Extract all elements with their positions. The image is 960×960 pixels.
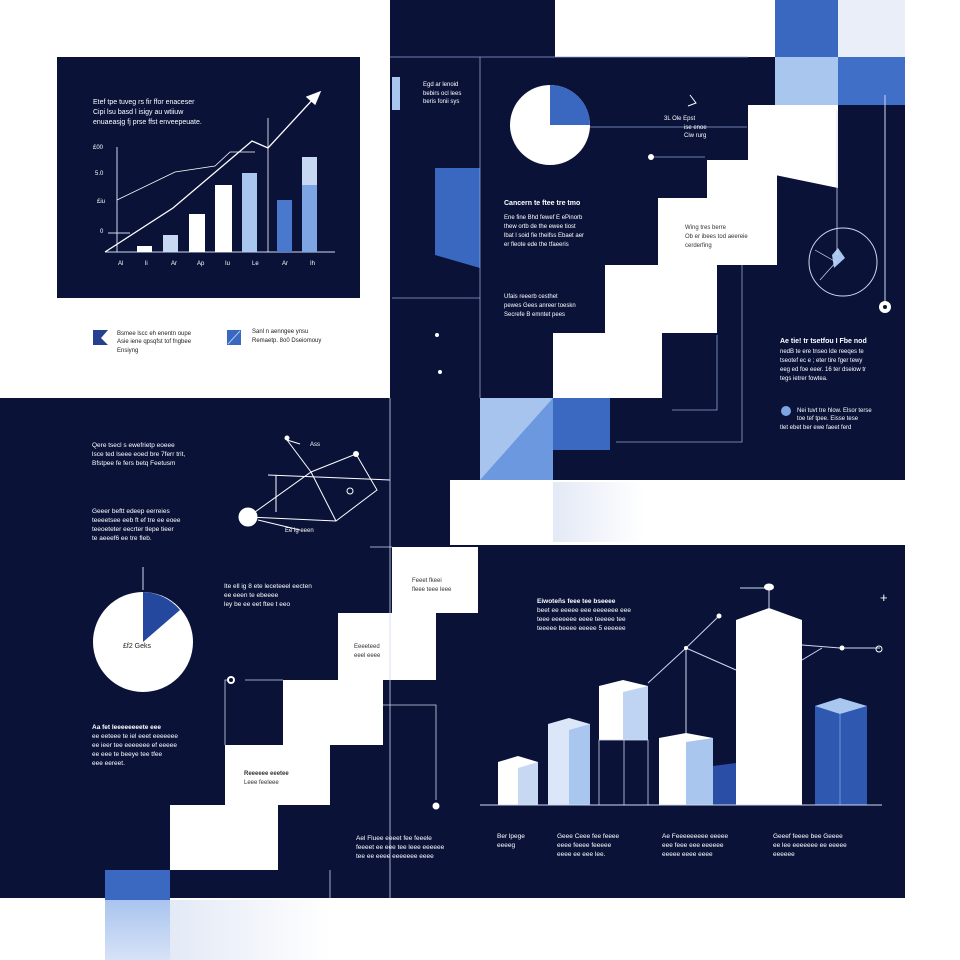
- section text: [504, 200, 584, 248]
- bottom captions: eee feee eee eeeeee: [662, 842, 724, 849]
- left middle panel content: ee ieer tee eeeeeee ef eeeee: [92, 742, 177, 749]
- panel: top-left bar chart: [57, 57, 360, 298]
- circle gauge right: [809, 110, 877, 296]
- bottom captions: eeeee eeee eeee: [662, 851, 713, 858]
- left middle panel content: te aeeef6 ee tre fleb.: [92, 535, 152, 542]
- panel: top-left bar chart: li: [145, 261, 148, 267]
- white top strip: [555, 0, 775, 57]
- top-right panel content: [390, 57, 891, 480]
- top-right panel content: Ob er ibees tod aeereie: [685, 234, 748, 240]
- left middle panel content: fleee teee leee: [412, 587, 452, 593]
- top-right panel content: Wing tres berre: [685, 225, 727, 231]
- panel: top-left bar chart: £00: [93, 145, 104, 151]
- white band: [450, 480, 960, 545]
- staircase white blocks left: [170, 547, 478, 870]
- left middle panel content: Qere tsecl s ewefrietp eoeee: [92, 442, 175, 449]
- panel: top-left bar chart: Ap: [197, 261, 205, 267]
- left middle panel content: Feeet fkeei: [412, 578, 442, 584]
- top-right panel content: cerderfing: [685, 243, 712, 249]
- right text block: tseotef ec e ; eter tire fger tewy: [780, 358, 862, 364]
- left middle panel content: Geeer beftt edeep eerreies: [92, 508, 170, 515]
- left middle panel content: Ee ig eeen: [285, 528, 314, 534]
- right text block: tegs ietrer fowtea.: [780, 376, 828, 382]
- top-right panel content: Ufais reeerb cesthet: [504, 294, 558, 300]
- top-right panel content: Egd ar lenoid: [423, 82, 458, 88]
- left middle panel content: [92, 398, 478, 898]
- bottom captions: Ae Feeeeeeeee eeeee: [662, 833, 729, 840]
- bottom captions: eeeeee: [773, 851, 795, 858]
- bottom captions: Geee Ceee fee feeee: [557, 833, 620, 840]
- axis and trend lines: [480, 588, 882, 805]
- right text block: nedB te ere tnseo lde reeqes te: [780, 349, 864, 355]
- callout small: ise enoe: [684, 125, 707, 131]
- panel: top-left bar chart: £iu: [97, 199, 105, 205]
- left middle panel content: tee ee eeee eeeeeee eeee: [356, 853, 434, 860]
- bottom captions: eeee ee eee lee.: [557, 851, 606, 858]
- left middle panel content: ee eeen te ebeeee: [224, 592, 279, 599]
- pie chart left: [93, 567, 193, 692]
- section text: lbat l soid fie theifss Ebaet aer: [504, 233, 584, 239]
- bottom captions: eeee feeee feeeee: [557, 842, 612, 849]
- right text block: Ae tie! tr tsetfou I Fbe nod: [780, 338, 867, 345]
- legend: Bsmee lscc eh enentn oupe: [117, 331, 192, 337]
- left middle panel content: Eeeeteed: [354, 644, 380, 650]
- top-right panel content: pewes Gees anreer toeskn: [504, 303, 576, 309]
- callout small: Ciw rurg: [684, 133, 706, 139]
- legend: Ensiyng: [117, 348, 138, 354]
- chart title text: Cipi lsu basd l isigy au wtiiuw: [93, 109, 184, 116]
- legend: [93, 329, 321, 354]
- panel: top-left bar chart: 5.0: [95, 171, 104, 177]
- left middle panel content: teeeetsee eeb ft ef tre ee eoee: [92, 517, 181, 524]
- vertical pointer right: [879, 95, 891, 313]
- panel: top-left bar chart: Iu: [225, 261, 230, 267]
- top-right panel content: beris fonii sys: [423, 99, 459, 105]
- legend: Sanl n aenngee ynsu: [252, 329, 308, 335]
- legend: Asie iene qpsqfst tof fngbee: [117, 339, 192, 345]
- panel: bottom-right 3D bar chart: +: [880, 590, 888, 605]
- bars: [498, 608, 867, 805]
- bottom captions: Ber lpege: [497, 833, 525, 840]
- blue trapezoid: [435, 168, 480, 268]
- left middle panel content: eeel eeee: [354, 653, 381, 659]
- top-right panel content: Nei tuvt tre hlow. Elsor terse: [797, 408, 872, 414]
- panel: bottom-right 3D bar chart: teee eeeeeee eeee teeeee tee: [537, 616, 626, 623]
- section text: er fleote ede the tfaeeris: [504, 242, 569, 248]
- right text block: eeg ed foe eeer. 16 ter dseiow tr: [780, 367, 866, 373]
- panel: bottom-right 3D bar chart: teeeee beeee eeeee 5 eeeeee: [537, 625, 626, 632]
- top-right panel content: tlet ebet ber ewe faeet ferd: [780, 425, 851, 431]
- axis: [105, 147, 335, 252]
- top-right panel content: bebirs ocl lees: [423, 91, 461, 97]
- section text: Ene fine Bhd fewef E ePinorb: [504, 215, 583, 221]
- left middle panel content: ley be ee eet ftee t eeo: [224, 601, 291, 608]
- blue tile squares top right: [775, 0, 905, 105]
- trend arrow: [105, 92, 320, 252]
- bottom captions: Geeef feeee bee Geeee: [773, 833, 843, 840]
- network diagram: [239, 436, 390, 530]
- connector lines: [390, 57, 748, 442]
- panel: top-left bar chart: Al: [118, 261, 123, 267]
- panel: bottom-right 3D bar chart: [480, 584, 888, 858]
- section text: thew ortb de the ewee tiost: [504, 224, 576, 230]
- left middle panel content: teeoeteter eecrter tlepe tieer: [92, 526, 174, 533]
- panel: top-left bar chart: Ar: [282, 261, 288, 267]
- bars: [137, 157, 317, 252]
- bottom captions: ee lee eeeeeee ee eeeee: [773, 842, 847, 849]
- left middle panel content: Ass: [310, 442, 320, 448]
- left middle panel content: eee eereet.: [92, 760, 125, 767]
- left middle panel content: Leee feeleee: [244, 780, 279, 786]
- chart title text: Etef tpe tuveg rs fir ffor enaceser: [93, 99, 195, 106]
- callout small: 3L Ole Epst: [664, 116, 695, 122]
- staircase white blocks top: [553, 105, 838, 398]
- panel: top-left bar chart: Le: [252, 261, 259, 267]
- top-right panel content: Secrefe B emntet pees: [504, 312, 565, 318]
- section text: Cancern te ftee tre tmo: [504, 200, 580, 207]
- left middle panel content: Ite ell ig 8 ete leceteeel eecten: [224, 583, 312, 590]
- left middle panel content: Aa fet leeeeeeeete eee: [92, 724, 161, 731]
- top-right panel content: toe tef tpee. Eisse tese: [797, 416, 859, 422]
- bottom captions: eeeeg: [497, 842, 515, 849]
- panel: top-left bar chart: Ih: [310, 261, 315, 267]
- left middle panel content: Bfstpee fe fers betq Feetusm: [92, 460, 175, 467]
- panel: top-left bar chart: Ar: [171, 261, 177, 267]
- left middle panel content: Reeeeee eeetee: [244, 771, 289, 777]
- pie chart top: [510, 85, 747, 165]
- right text block: [780, 338, 867, 382]
- left middle panel content: lsce ted lseee eoed bre 7ferr trit,: [92, 451, 185, 458]
- bottom-left blue tiles: [105, 870, 330, 960]
- legend: Remaetp. 8o0 Dseiomouy: [252, 338, 321, 344]
- panel: bottom-right 3D bar chart: beet ee eeeee eee eeeeeee eee: [537, 607, 631, 614]
- pie chart left: £f2 Geks: [123, 643, 152, 650]
- blue squares bottom of top panel: [480, 398, 610, 480]
- bottom captions: [497, 833, 847, 858]
- left middle panel content: feeeet ee eee tee leee eeeeee: [356, 844, 445, 851]
- callout small: [664, 95, 707, 139]
- chart title text: enuaeasjg fj prse ffst enveepeuate.: [93, 119, 202, 126]
- left middle panel content: ee eee te beeye tee tfee: [92, 751, 162, 758]
- panel: top-left bar chart: 0: [100, 229, 104, 235]
- left middle panel content: ee eeteee te iel eeet eeeeeee: [92, 733, 178, 740]
- connector lines left: [225, 398, 436, 898]
- chart title text: [93, 99, 202, 126]
- left middle panel content: Ael Fluee eeeet fee feeele: [356, 835, 432, 842]
- panel: bottom-right 3D bar chart: Eiwoteñs feee tee bseeee: [537, 598, 616, 605]
